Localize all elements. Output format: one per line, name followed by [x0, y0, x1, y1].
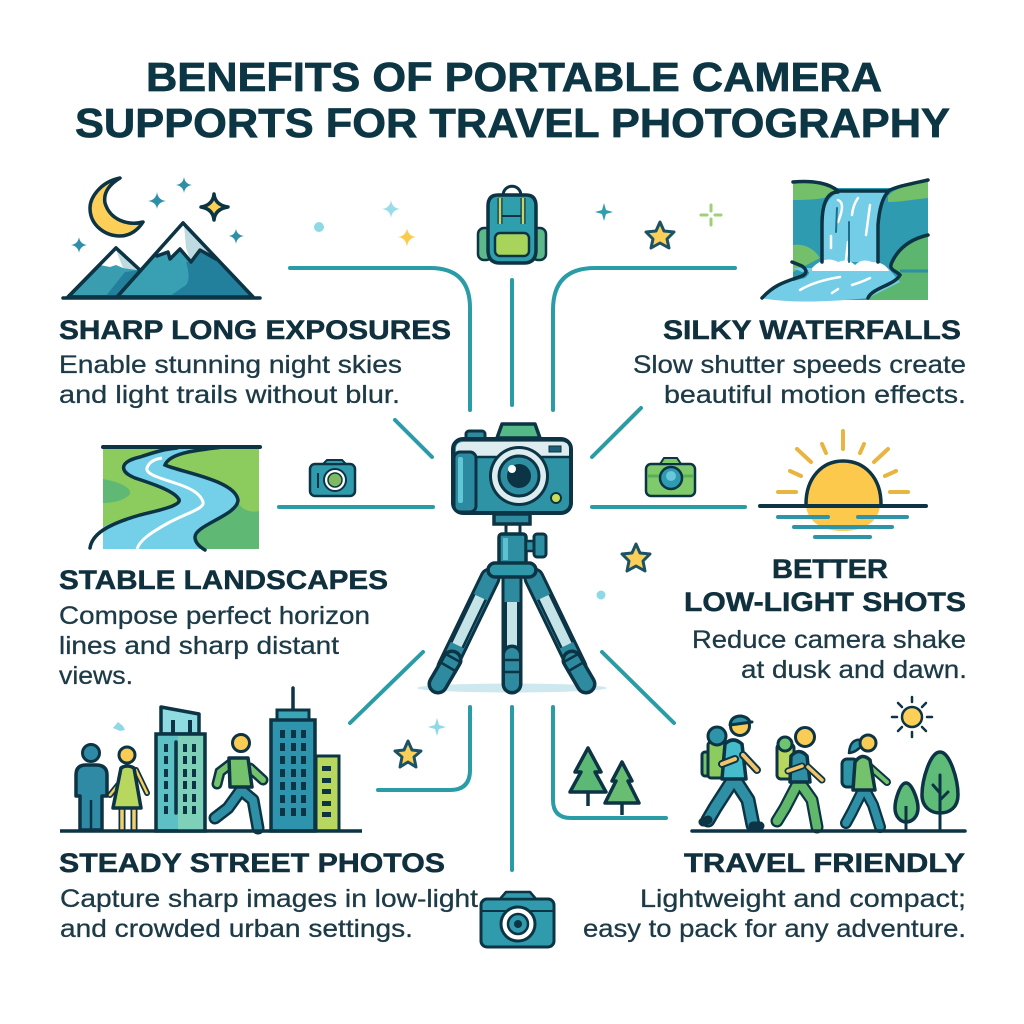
icon: backpack [478, 186, 546, 263]
text: sharp long exposures: SHARP LONG EXPOSURES [59, 315, 451, 345]
title [75, 54, 950, 146]
text: sharp long exposures: Enable stunning night skies [59, 351, 402, 379]
text: better low-light shots: Reduce camera shake [692, 626, 966, 654]
text: stable landscapes: STABLE LANDSCAPES [59, 565, 388, 595]
icon: waterfall [760, 180, 928, 302]
icon: small teal camera [310, 460, 355, 496]
icon: city street [60, 688, 362, 831]
text: travel friendly: Lightweight and compact; [640, 885, 966, 913]
hiker three [842, 735, 887, 827]
text: travel friendly [583, 848, 966, 943]
text: better low-light shots: at dusk and dawn. [741, 656, 967, 684]
text: better low-light shots [684, 554, 967, 684]
sun [892, 697, 932, 737]
hiker two [777, 728, 822, 827]
text: sharp long exposures: and light trails without blur. [59, 381, 400, 409]
ground shadow [417, 684, 607, 692]
decorative sparkles top right [595, 203, 721, 248]
text: steady street photos: and crowded urban settings. [60, 915, 413, 943]
icon: pine trees [570, 748, 639, 815]
central camera on tripod [417, 424, 607, 692]
text: steady street photos: STEADY STREET PHOTOS [59, 848, 445, 878]
icon: sunset [760, 431, 926, 537]
text: travel friendly: TRAVEL FRIENDLY [684, 848, 965, 878]
decorative stars lower left [395, 718, 446, 767]
text: better low-light shots: BETTER [772, 554, 888, 584]
text: silky waterfalls [633, 315, 966, 409]
trees [895, 752, 958, 831]
title: BENEFITS OF PORTABLE CAMERA [146, 54, 882, 100]
text: steady street photos: Capture sharp images in low-light [60, 885, 478, 913]
icon: bottom camera [481, 892, 554, 947]
text: sharp long exposures [59, 315, 451, 409]
text: stable landscapes: views. [59, 662, 133, 690]
icon: river landscape [90, 447, 260, 550]
camera body [466, 431, 485, 441]
text: stable landscapes: lines and sharp distant [59, 632, 339, 660]
hiker one [702, 716, 760, 826]
title: SUPPORTS FOR TRAVEL PHOTOGRAPHY [75, 100, 950, 146]
decorative sparkles top left [314, 200, 416, 247]
tripod legs [438, 578, 586, 684]
text: stable landscapes: Compose perfect horizon [59, 602, 370, 630]
text: silky waterfalls: SILKY WATERFALLS [663, 315, 961, 345]
text: steady street photos [59, 848, 478, 943]
icon: small green camera [646, 458, 695, 496]
text: stable landscapes [59, 565, 388, 690]
text: better low-light shots: LOW-LIGHT SHOTS [684, 587, 966, 617]
tripod head [506, 524, 520, 535]
icon: night mountains [63, 177, 260, 298]
icon: hikers [692, 697, 965, 831]
text: silky waterfalls: Slow shutter speeds create [633, 351, 966, 379]
text: travel friendly: easy to pack for any adventure. [583, 915, 966, 943]
text: silky waterfalls: beautiful motion effects. [664, 381, 966, 409]
connector lines [279, 268, 745, 870]
decorative stars mid right [596, 544, 650, 600]
